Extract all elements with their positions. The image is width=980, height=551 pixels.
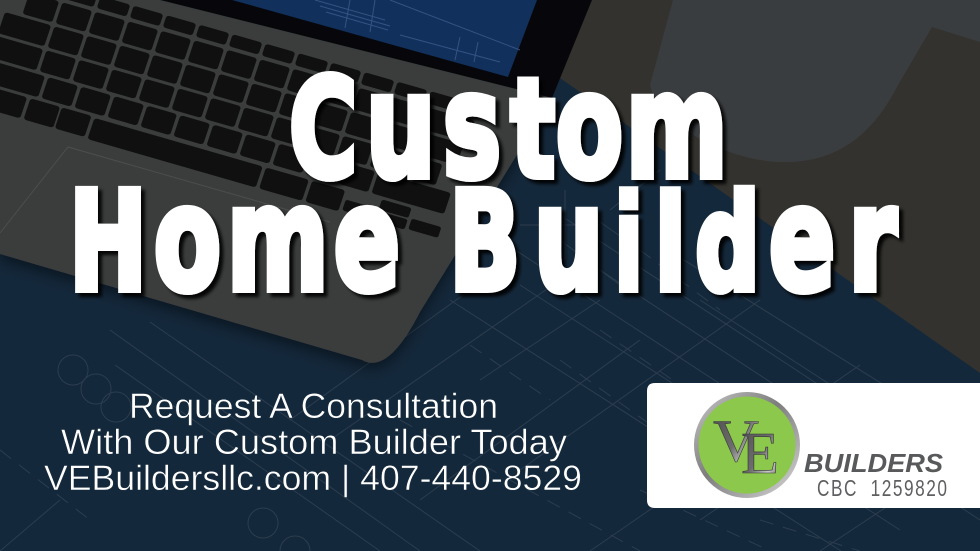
title line: Home Builder: l [655,170,685,321]
cta line 1: Request A Consultation [129,387,498,426]
trackpad outline [0,147,330,233]
title line: Home Builder: B [449,164,520,322]
laptop body [0,0,552,363]
title line: Home Builder: i [613,168,644,323]
title line: Custom: us [366,44,501,210]
title line: Home Builder: ome [154,157,400,323]
title: Custom Home Builder [69,44,897,323]
call to action text [44,387,582,498]
logo badge: VE circle: V [713,408,759,474]
logo wordmark: BUILDERS: BUILDERS [804,448,944,478]
title line: Home Builder: H [69,164,147,322]
title line: Custom: C [289,51,357,209]
logo badge: VE circle [694,392,800,498]
logo panel [647,383,980,508]
title line: Custom: t [511,51,555,209]
keyboard keys [0,0,482,240]
laptop screen bezel [160,0,592,98]
background: desk surface [555,0,980,373]
license number: CBC 1259820 [817,477,947,502]
logo badge: VE circle: E [741,420,779,486]
cta line 2: With Our Custom Builder Today [61,423,568,462]
background: mug and paper shape [650,0,980,162]
title line: Home Builder: er [769,157,897,323]
cta line 3: VEBuildersllc.com | 407-440-8529 [44,459,582,498]
laptop screen blueprint [232,0,537,77]
title line: Home Builder: u [534,157,603,323]
title line: Home Builder: d [695,166,760,321]
title line: Custom: om [556,44,727,210]
